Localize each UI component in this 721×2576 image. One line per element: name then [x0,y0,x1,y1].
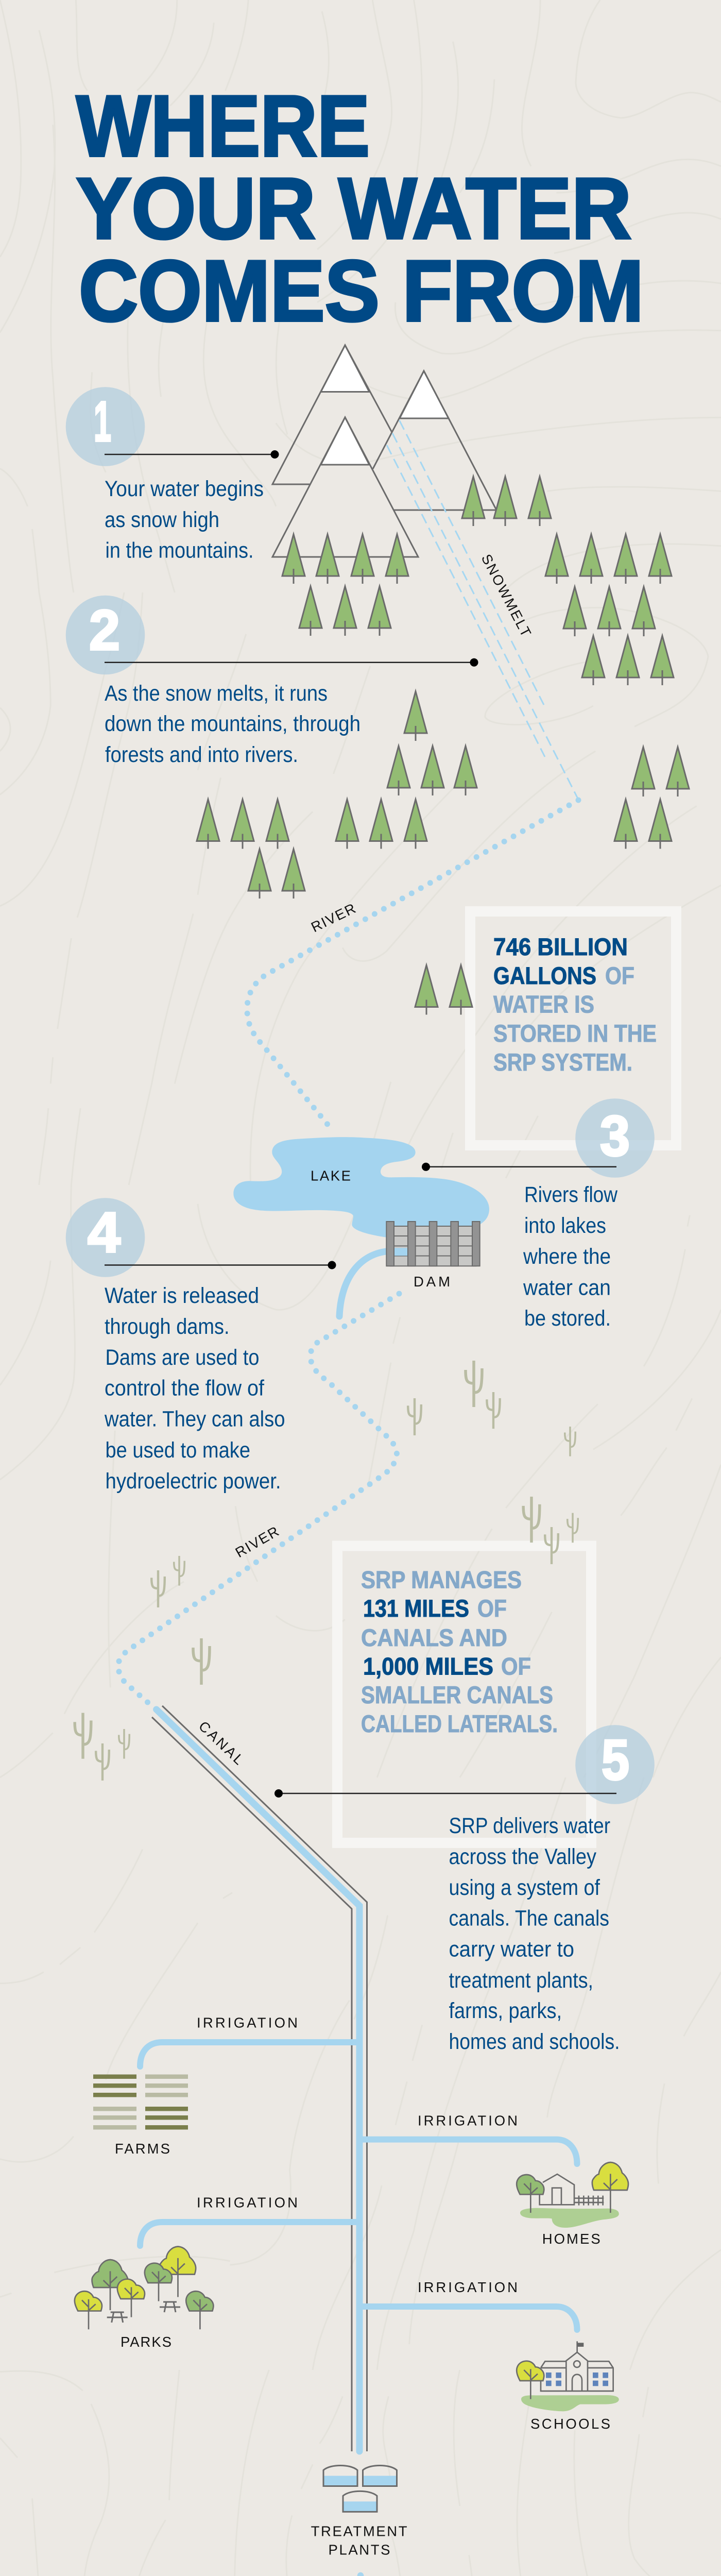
title [76,77,644,339]
label: river: RIVER [233,1523,282,1561]
lake [233,1137,489,1238]
icon: mountains [272,345,496,557]
label: treatment plants: PLANTS [329,2542,390,2558]
step 2: As the snow melts, it runs [105,681,328,706]
icon: homes with yard [517,2162,628,2228]
step 5: 5 [602,1728,629,1792]
step 1 [66,387,279,563]
icon: farms [93,2074,188,2130]
step 5 [274,1725,655,2054]
title: YOUR WATER [76,160,631,257]
step 4: hydroelectric power. [105,1469,281,1494]
label: canal: CANAL [196,1718,247,1768]
callout frame: SRP manages canals: SMALLER CANALS [361,1681,553,1708]
dotted river: dam to canal [118,1294,399,1704]
icon: schools with yard [517,2341,619,2411]
icon: dam [386,1222,480,1266]
irrigation labels [197,2014,518,2295]
canal [152,1706,367,2451]
step 5: canals. The canals [449,1906,609,1931]
callout frame: SRP manages canals: 1,000 MILES [363,1653,493,1680]
step 5: treatment plants, [449,1968,593,1993]
step 5: carry water to [449,1937,574,1962]
callout frame: SRP manages canals: SRP MANAGES [361,1566,522,1593]
step 3: water can [523,1275,611,1300]
step 3: Rivers flow [524,1182,618,1207]
step 4: water. They can also [104,1407,285,1432]
callout frame: SRP manages canals: CALLED LATERALS. [361,1710,558,1737]
step 4: 4 [88,1201,121,1264]
step 2 [66,596,478,767]
step 3 [422,1098,655,1331]
callout frame: SRP manages canals [337,1546,591,1843]
step 1: as snow high [105,507,219,532]
step 2: forests and into rivers. [105,742,298,767]
label: homes: HOMES [542,2231,600,2247]
step 5: homes and schools. [449,2029,620,2054]
label: schools: SCHOOLS [530,2416,610,2432]
callout frame: 746 billion gallons: GALLONS [493,962,596,989]
pine trees: middle forest [197,691,477,1015]
desert cacti [75,1361,578,1781]
step 3: where the [523,1244,611,1269]
callout frame: 746 billion gallons [470,911,676,1145]
dotted river: mountains to lake [247,800,578,1129]
title: WHERE [76,77,370,174]
step 3: into lakes [524,1213,606,1238]
treated water pipe and branches [163,2575,361,2576]
callout frame: 746 billion gallons: 746 BILLION [493,933,628,960]
irrigation labels: IRRIGATION [418,2112,518,2129]
label: treatment plants: TREATMENT [311,2523,407,2539]
irrigation labels: IRRIGATION [197,2195,298,2211]
dam release pipe [339,1251,394,1316]
label: parks: PARKS [121,2334,171,2350]
step 5: across the Valley [449,1844,596,1869]
step 3: be stored. [524,1306,611,1331]
label: treatment plants [311,2523,407,2558]
callout frame: 746 billion gallons: SRP SYSTEM. [493,1048,632,1076]
callout frame: 746 billion gallons: STORED IN THE [493,1020,657,1047]
callout frame: SRP manages canals: CANALS AND [361,1624,507,1651]
label: farms: FARMS [115,2141,170,2157]
label: snowmelt: SNOWMELT [478,551,535,639]
callout frame: SRP manages canals: 131 MILES [363,1595,469,1622]
step 2: down the mountains, through [105,711,360,736]
step 3: 3 [600,1105,630,1168]
step 4: through dams. [105,1314,230,1339]
snowmelt dashed streams [387,420,578,800]
step 4: be used to make [105,1438,250,1463]
step 2: 2 [89,599,120,662]
step 4: control the flow of [105,1376,265,1400]
label: lake: LAKE [311,1168,351,1184]
label: river: RIVER [308,900,358,935]
step 5: farms, parks, [449,1998,562,2023]
callout frame: SRP manages canals: OF [477,1595,507,1622]
callout frame: 746 billion gallons: WATER IS [493,990,594,1018]
step 4 [66,1198,336,1494]
icon: parks [75,2247,213,2329]
step 5: SRP delivers water [449,1814,610,1838]
pine trees: right forest [545,534,689,849]
step 1: 1 [94,390,111,453]
step 4: Dams are used to [105,1345,260,1370]
icon: treatment plant tanks [323,2466,397,2512]
irrigation pipes [140,2042,577,2330]
step 1: in the mountains. [105,538,253,563]
callout frame: SRP manages canals: OF [501,1653,531,1680]
step 1: Your water begins [105,477,264,501]
label: dam: DAM [414,1274,450,1290]
irrigation labels: IRRIGATION [197,2014,298,2031]
callout frame: 746 billion gallons: OF [605,962,634,989]
step 5: using a system of [449,1875,600,1900]
step 4: Water is released [105,1283,259,1308]
irrigation labels: IRRIGATION [418,2279,518,2295]
pine trees: mountain cluster [282,477,551,636]
title: COMES FROM [79,242,644,339]
